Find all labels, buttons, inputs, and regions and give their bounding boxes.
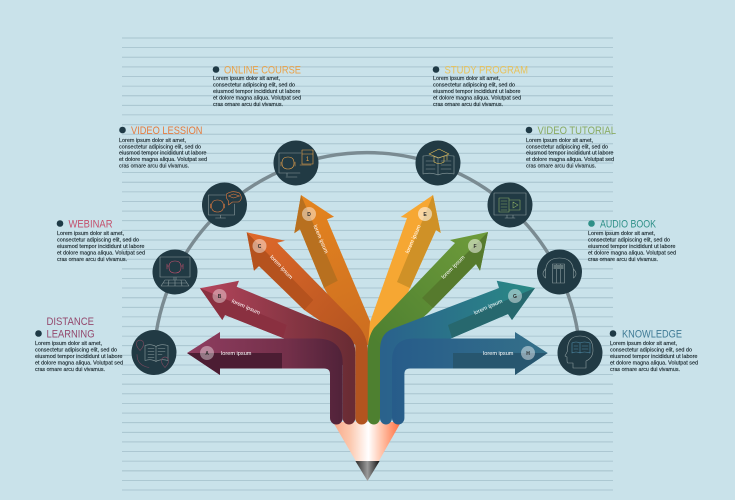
text: study program body: Lorem ipsum dolor sit amet, (433, 76, 500, 82)
text: distance learning body: consectetur adipiscing elit, sed do (35, 348, 117, 354)
semicircular timeline arc (154, 153, 580, 352)
heading: knowledge: KNOWLEDGE (622, 328, 682, 340)
text: knowledge body (610, 341, 698, 373)
text: knowledge body: cras ornare arcu dui vivamus. (610, 367, 680, 373)
text: webinar body: consectetur adipiscing elit, sed do (57, 237, 139, 243)
arrow F: lorem ipsum (441, 255, 467, 281)
icon: online course monitor and calendar (274, 140, 318, 186)
text: audio book body: cras ornare arcu dui vivamus. (588, 257, 658, 263)
heading: distance learning (46, 316, 94, 340)
icon: video tutorial monitor with play (488, 182, 532, 228)
icon: online course monitor and calendar: 1 (306, 157, 310, 163)
panel: video tutorial (526, 125, 616, 170)
panel: online course (213, 64, 301, 108)
text: study program body: eiusmod tempor incididunt ut labore (433, 89, 521, 95)
arrow A: A (205, 351, 209, 357)
text: study program body: cras ornare arcu dui vivamus. (433, 102, 503, 108)
text: webinar body: cras ornare arcu dui vivamus. (57, 257, 127, 263)
text: audio book body: et dolore magna aliqua. Volutpat sed (588, 250, 676, 256)
text: online course body: cras ornare arcu dui vivamus. (213, 102, 283, 108)
text: study program body: et dolore magna aliqua. Volutpat sed (433, 96, 521, 102)
text: video lession body: et dolore magna aliqua. Volutpat sed (119, 157, 207, 163)
text: video lession body: Lorem ipsum dolor sit amet, (119, 138, 186, 144)
text: knowledge body: eiusmod tempor incididunt ut labore (610, 354, 698, 360)
icon: video lession monitor and graduation cap (202, 182, 247, 228)
panel: audio book (588, 218, 676, 263)
pencil graphite tip (355, 461, 380, 481)
text: video lession body: eiusmod tempor incididunt ut labore (119, 151, 207, 157)
text: audio book body: Lorem ipsum dolor sit amet, (588, 231, 655, 237)
heading: study program: STUDY PROGRAM (444, 64, 528, 76)
arrow G: lorem ipsum (473, 299, 504, 317)
heading: distance learning: LEARNING (46, 328, 94, 340)
pencil wood (333, 422, 401, 481)
text: distance learning body (35, 341, 123, 373)
heading: distance learning: DISTANCE (46, 316, 94, 328)
text: online course body: eiusmod tempor incididunt ut labore (213, 89, 301, 95)
text: video tutorial body (526, 138, 614, 170)
heading: online course: ONLINE COURSE (224, 64, 301, 76)
text: distance learning body: et dolore magna aliqua. Volutpat sed (35, 360, 123, 366)
icon: webinar monitor and keyboard (152, 250, 198, 294)
panel: knowledge (610, 328, 698, 373)
arrow F: F (473, 244, 477, 250)
arrow A (187, 332, 343, 425)
panel: webinar (57, 218, 145, 263)
text: audio book body: eiusmod tempor incididunt ut labore (588, 244, 676, 250)
arrow F (368, 232, 488, 424)
text: video tutorial body: et dolore magna aliqua. Volutpat sed (526, 157, 614, 163)
text: online course body (213, 76, 301, 108)
text: video lession body: consectetur adipiscing elit, sed do (119, 144, 201, 150)
text: knowledge body: consectetur adipiscing elit, sed do (610, 348, 692, 354)
arrow E: E (423, 212, 427, 218)
text: knowledge body: et dolore magna aliqua. Volutpat sed (610, 360, 698, 366)
text: video tutorial body: cras ornare arcu dui vivamus. (526, 164, 596, 170)
text: distance learning body: Lorem ipsum dolor sit amet, (35, 341, 102, 347)
arrow H: H (526, 351, 530, 357)
arrow D: D (307, 212, 311, 218)
text: webinar body (57, 231, 145, 263)
text: webinar body: Lorem ipsum dolor sit amet, (57, 231, 124, 237)
arrow H: lorem ipsum (483, 351, 514, 357)
text: distance learning body: cras ornare arcu dui vivamus. (35, 367, 105, 373)
text: webinar body: et dolore magna aliqua. Volutpat sed (57, 250, 145, 256)
text: study program body (433, 76, 521, 108)
text: video tutorial body: eiusmod tempor incididunt ut labore (526, 151, 614, 157)
arrow E (368, 195, 441, 345)
arrow C: C (258, 244, 262, 250)
text: online course body: consectetur adipiscing elit, sed do (213, 83, 295, 89)
text: audio book body: consectetur adipiscing elit, sed do (588, 237, 670, 243)
text: distance learning body: eiusmod tempor incididunt ut labore (35, 354, 123, 360)
arrow D: lorem ipsum (311, 224, 329, 255)
arrow B (200, 281, 355, 424)
arrow G: G (513, 294, 517, 300)
arrow B: B (218, 294, 222, 300)
text: audio book body (588, 231, 676, 263)
text: video lession body: cras ornare arcu dui vivamus. (119, 164, 189, 170)
panel: distance learning (35, 316, 123, 373)
heading: video lession: VIDEO LESSION (131, 125, 202, 137)
text: video lession body (119, 138, 207, 170)
arrow C (247, 232, 368, 425)
text: online course body: Lorem ipsum dolor sit amet, (213, 76, 280, 82)
pencil (333, 422, 401, 481)
text: video tutorial body: consectetur adipiscing elit, sed do (526, 144, 608, 150)
panel: video lession (119, 125, 207, 170)
icon: knowledge head with book (558, 330, 602, 376)
arrow E: lorem ipsum (405, 224, 423, 255)
arrow D (294, 195, 372, 345)
text: study program body: consectetur adipiscing elit, sed do (433, 83, 515, 89)
heading: video tutorial: VIDEO TUTORIAL (538, 125, 616, 137)
icon: audio book with headphones (537, 250, 582, 294)
text: webinar body: eiusmod tempor incididunt ut labore (57, 244, 145, 250)
text: video tutorial body: Lorem ipsum dolor sit amet, (526, 138, 593, 144)
heading: webinar: WEBINAR (68, 218, 113, 230)
text: online course body: et dolore magna aliqua. Volutpat sed (213, 96, 301, 102)
arrow A: lorem ipsum (221, 351, 252, 357)
text: knowledge body: Lorem ipsum dolor sit amet, (610, 341, 677, 347)
arrow G (380, 281, 535, 424)
icon: distance learning book and pins (132, 330, 176, 375)
arrow H (392, 332, 548, 424)
arrow B: lorem ipsum (230, 299, 261, 317)
icon: study program book and cap (416, 140, 460, 186)
heading: audio book: AUDIO BOOK (600, 218, 657, 230)
panel: study program (433, 64, 528, 108)
arrow C: lorem ipsum (268, 254, 294, 281)
